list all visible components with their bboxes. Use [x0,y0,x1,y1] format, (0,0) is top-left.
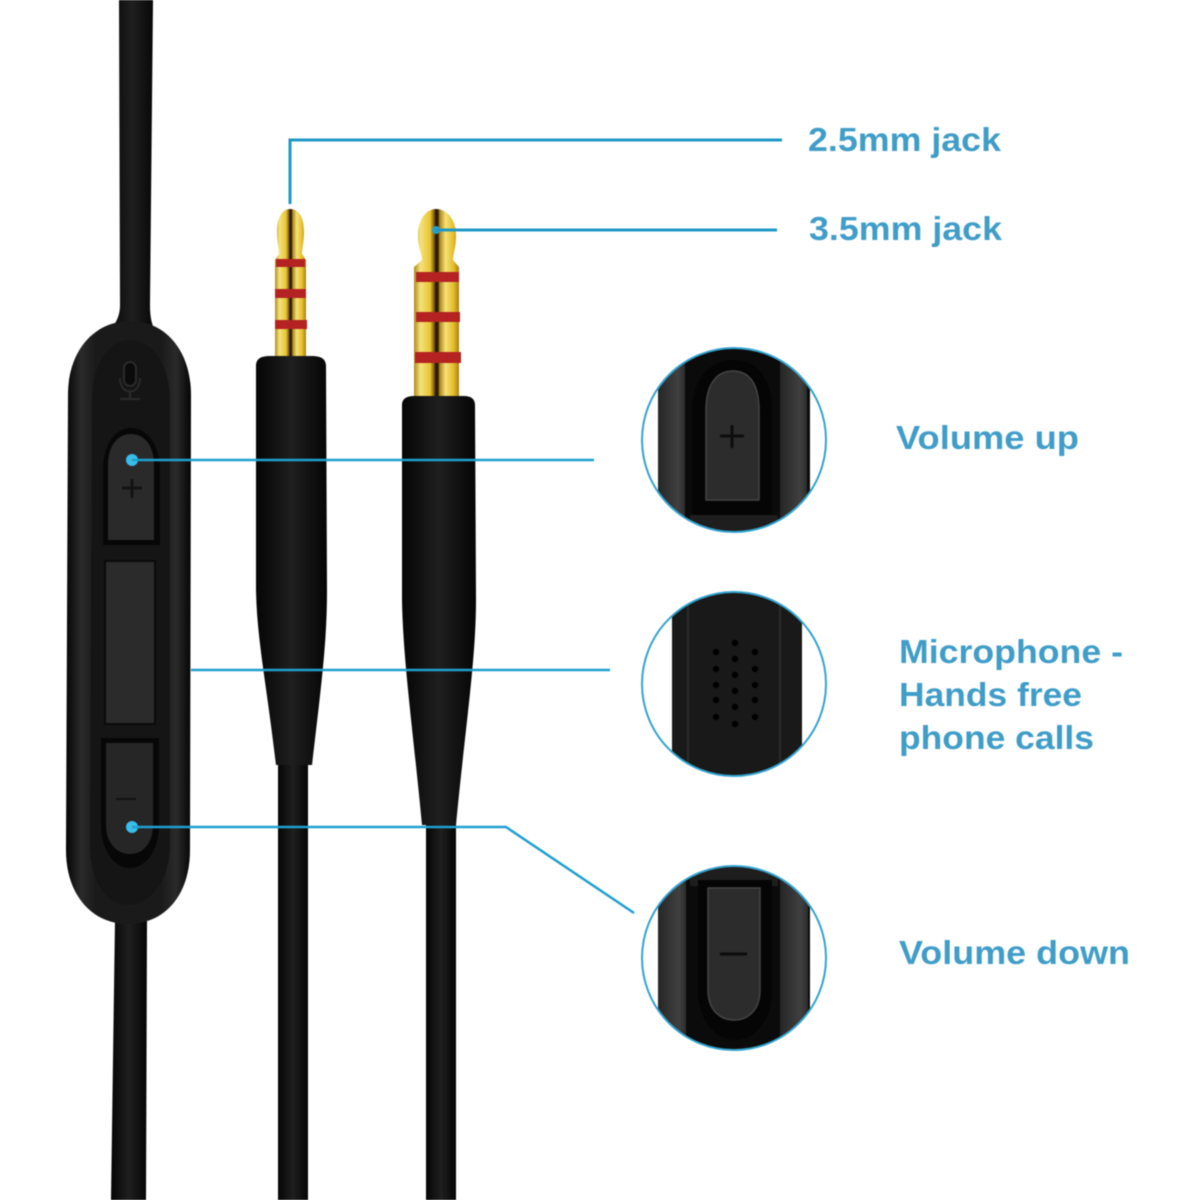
3.5mm gold tip [414,209,461,396]
label: microphone: phone calls [899,719,1094,756]
lower remote cable [111,920,147,1200]
leader line: volume down [126,821,634,913]
leader line: volume up [126,454,594,466]
icon: microphone on remote [120,362,140,399]
label: volume up: Volume up [896,419,1079,456]
2.5mm plug cable [278,765,308,1200]
label: volume down: Volume down [899,934,1130,971]
2.5mm gold tip [275,209,307,356]
upper remote cable [108,0,156,332]
microphone panel on remote [105,561,155,724]
label: microphone: Microphone - [899,633,1123,670]
volume up button on remote [103,428,160,545]
2.5mm plug [256,209,327,1200]
label: microphone: Hands free [899,676,1082,713]
2.5mm plug housing [256,356,327,765]
inline remote control [66,321,191,924]
volume down button on remote [101,738,159,868]
microphone holes [713,640,758,727]
detail circle: volume up [642,340,826,540]
detail circle: microphone [642,590,826,780]
label: 3.5mm jack: 3.5mm jack [809,210,1003,247]
3.5mm plug cable [426,825,456,1200]
leader line: microphone [191,669,610,671]
3.5mm plug [402,209,476,1200]
leader line: 3.5mm jack [432,226,777,234]
3.5mm plug housing [402,396,476,825]
label: 2.5mm jack: 2.5mm jack [808,121,1002,158]
leader line: 2.5mm jack [290,140,782,204]
detail circle: volume down [642,860,826,1060]
